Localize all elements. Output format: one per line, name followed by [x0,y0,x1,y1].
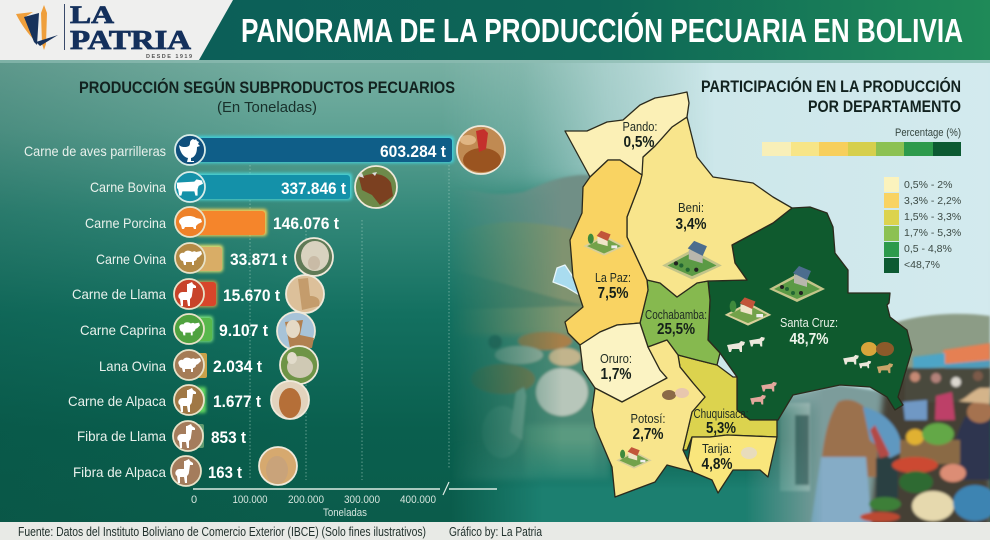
gradient legend: Percentage (%) [895,127,961,139]
bar chart heading [79,78,455,116]
department: Oruro: 1,7% [600,366,632,383]
axis [191,482,497,519]
row: Carne de aves parrilleras [24,126,505,174]
row: Carne de Alpaca: 1.677 t [213,392,261,411]
row: Carne Ovina: 33.871 t [230,250,287,269]
row: Carne Porcina: 146.076 t [273,214,339,233]
department: Chuquisaca: Chuquisaca: [694,406,748,421]
header [0,0,990,63]
footer bar [0,522,990,540]
row: Carne Bovina [90,166,397,208]
row: Carne de Llama [72,275,324,313]
credit: Gráfico by: La Patria [449,525,542,539]
row: Fibra de Alpaca: 163 t [208,463,242,482]
department: Potosí: 2,7% [632,426,664,443]
row: Fibra de Llama: Fibra de Llama [77,428,166,444]
department: Potosí: Potosí: [630,411,666,426]
row: Lana Ovina [99,346,318,384]
logo wordmark: LA [70,2,114,29]
range legend: 0,5 - 4,8% [904,243,952,255]
row: Carne Ovina [96,238,333,276]
row: Carne Caprina: Carne Caprina [80,322,166,338]
department: Chuquisaca [678,355,777,450]
axis: 300.000 [344,494,380,506]
row: Carne Ovina: Carne Ovina [96,251,166,267]
axis: 400.000 [400,494,436,506]
range legend: 0,5% - 2% [904,179,952,191]
department: Tarija [688,435,777,493]
logo panel [0,0,233,60]
row: Carne de Llama: Carne de Llama [72,286,166,302]
department: Cochabamba: 25,5% [657,321,695,338]
department: Oruro: Oruro: [600,351,632,366]
department: Pando: 0,5% [624,134,654,151]
axis: 200.000 [288,494,324,506]
row: Lana Ovina: 2.034 t [213,357,262,376]
llamas and alpacas herd [450,332,610,480]
map of Bolivia [553,92,912,497]
row: Carne de aves parrilleras: 603.284 t [380,142,446,161]
map heading [701,77,961,116]
department: Potosí [592,340,705,497]
logo wordmark [70,2,192,60]
department: La Paz: La Paz: [595,270,631,285]
row: Carne Porcina [85,207,339,237]
icon: La Patria emblem [16,5,58,50]
row: Carne Bovina: Carne Bovina [90,179,166,195]
range legend: 3,3% - 2,2% [904,195,961,207]
row: Fibra de Llama [77,421,246,451]
axis: 100.000 [232,494,268,506]
lake Titicaca [553,265,590,300]
department: Beni [627,117,792,297]
logo wordmark: PATRIA [70,25,192,55]
right mountain [885,314,990,385]
department: Beni: 3,4% [676,216,706,233]
row: Carne Caprina [80,312,315,350]
department: La Paz [565,160,648,345]
department: Tarija: 4,8% [702,456,732,473]
range legend: <48,7% [904,259,940,271]
market photograph [745,343,990,530]
range legend [884,177,961,273]
department: Cochabamba [640,280,720,365]
produce [900,440,960,464]
row: Carne Caprina: 9.107 t [219,321,268,340]
row: Fibra de Alpaca [73,447,297,486]
mountains [458,174,590,340]
department: Oruro [580,323,667,402]
axis: 0 [191,494,197,506]
department: Pando [565,92,689,177]
row: Carne de Alpaca [68,381,309,419]
row: Carne Porcina: Carne Porcina [85,215,166,231]
bar chart heading: PRODUCCIÓN SEGÚN SUBPRODUCTOS PECUARIOS [79,78,455,97]
department: Santa Cruz: 48,7% [790,331,828,348]
row: Carne de Llama: 15.670 t [223,286,280,305]
department: Beni: Beni: [678,200,704,215]
row: Carne de aves parrilleras: Carne de aves parrilleras [24,143,166,159]
bar chart [24,126,505,519]
department: Santa Cruz: Santa Cruz: [780,315,838,330]
axis: Toneladas [323,507,367,519]
row: Fibra de Alpaca: Fibra de Alpaca [73,464,166,480]
row: Fibra de Llama: 853 t [211,428,246,447]
row: Carne Bovina: 337.846 t [281,179,346,198]
map heading: POR DEPARTAMENTO [808,98,961,116]
department: Cochabamba: Cochabamba: [645,307,707,322]
department: La Paz: 7,5% [598,285,628,302]
source note: Fuente: Datos del Instituto Boliviano de Comercio Exterior (IBCE) (Solo fines ilustrativos) [18,525,426,539]
row: Lana Ovina: Lana Ovina [99,358,166,374]
awnings [943,343,990,364]
department: Pando: Pando: [622,119,658,134]
row: Carne de Alpaca: Carne de Alpaca [68,393,166,409]
range legend: 1,7% - 5,3% [904,227,961,239]
department: Santa Cruz [708,207,912,420]
seller [956,416,990,480]
gradient legend [762,127,961,156]
mountains and herd [450,175,610,480]
bar chart heading: (En Toneladas) [217,99,317,116]
woman [820,400,877,477]
logo wordmark: DESDE 1919 [146,54,192,60]
crowd [905,368,990,402]
department: Tarija: Tarija: [702,441,732,456]
department: Chuquisaca: 5,3% [706,420,736,437]
range legend: 1,5% - 3,3% [904,211,961,223]
